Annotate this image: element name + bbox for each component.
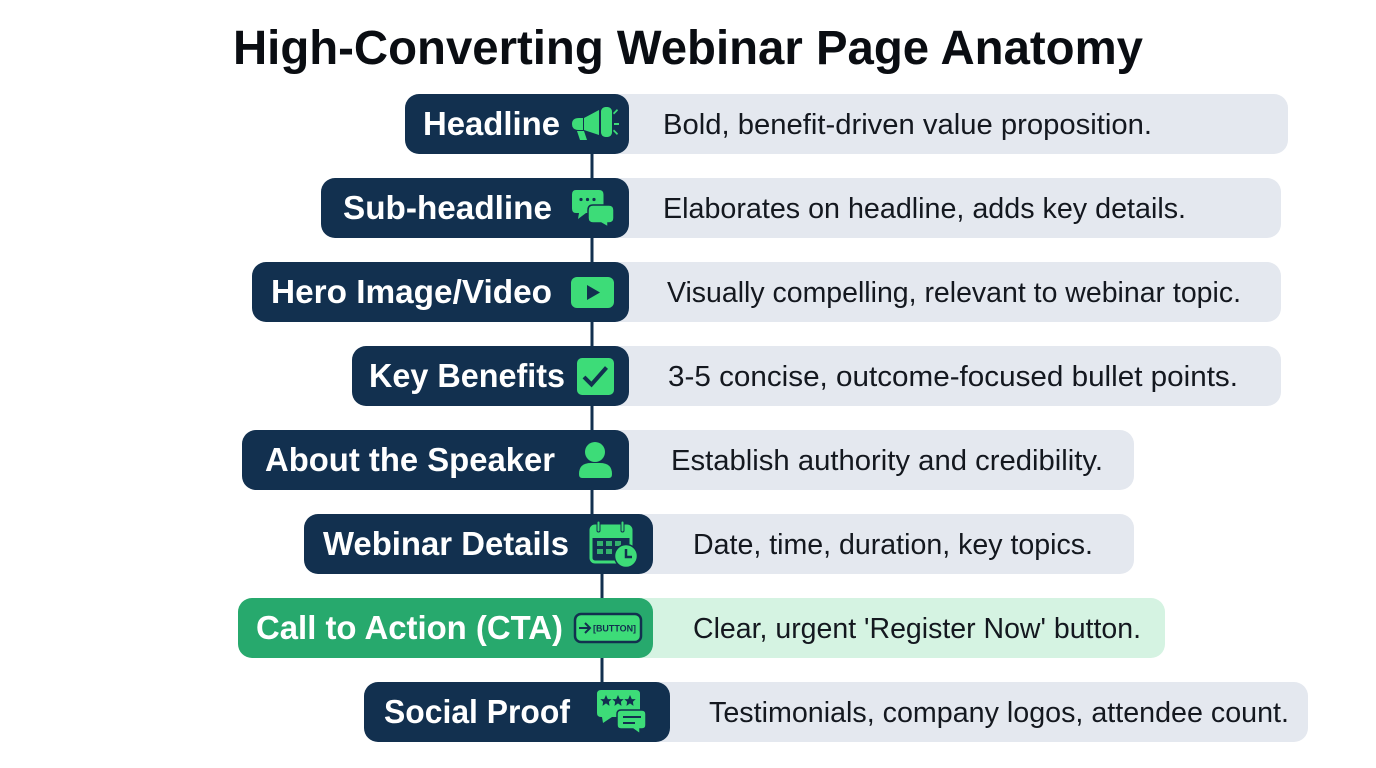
row: Social Proof: Social Proof bbox=[384, 693, 571, 730]
icon: check box bbox=[577, 358, 614, 395]
title: High-Converting Webinar Page Anatomy bbox=[233, 22, 1143, 75]
row: Webinar Details bbox=[304, 514, 1134, 574]
description: 3-5 concise, outcome-focused bullet points. bbox=[668, 361, 1238, 393]
icon: button bbox=[575, 614, 641, 642]
icon: play button bbox=[571, 277, 614, 308]
row: Hero Image/Video: Hero Image/Video bbox=[271, 273, 552, 310]
row: Headline bbox=[405, 94, 1288, 154]
description: Date, time, duration, key topics. bbox=[693, 529, 1093, 561]
description: Testimonials, company logos, attendee count. bbox=[709, 697, 1289, 729]
row: Call to Action bbox=[238, 598, 1165, 658]
description: Establish authority and credibility. bbox=[671, 445, 1103, 477]
icon: calendar with clock bbox=[591, 521, 638, 568]
row: Sub-headline: Sub-headline bbox=[343, 189, 552, 226]
row: Key Benefits bbox=[352, 346, 1281, 406]
icon: chat bubbles bbox=[572, 190, 614, 227]
description: Visually compelling, relevant to webinar topic. bbox=[667, 277, 1241, 309]
description: Elaborates on headline, adds key details. bbox=[663, 193, 1186, 225]
icon: button: [BUTTON] bbox=[593, 624, 636, 634]
row: Call to Action: Call to Action (CTA) bbox=[256, 609, 563, 646]
row: Sub-headline bbox=[321, 178, 1281, 238]
description: Bold, benefit-driven value proposition. bbox=[663, 109, 1152, 141]
description: Clear, urgent 'Register Now' button. bbox=[693, 613, 1141, 645]
row: About the Speaker: About the Speaker bbox=[265, 441, 555, 478]
icon: megaphone bbox=[572, 107, 619, 140]
row: Social Proof bbox=[364, 682, 1308, 742]
row: Hero Image/Video bbox=[252, 262, 1281, 322]
icon: person bbox=[579, 442, 612, 478]
icon: rating and comment bubbles bbox=[597, 690, 646, 734]
row: Webinar Details: Webinar Details bbox=[323, 525, 569, 562]
row: Headline: Headline bbox=[423, 105, 560, 142]
row: About the Speaker bbox=[242, 430, 1134, 490]
connector line bbox=[590, 150, 604, 690]
row: Key Benefits: Key Benefits bbox=[369, 357, 565, 394]
